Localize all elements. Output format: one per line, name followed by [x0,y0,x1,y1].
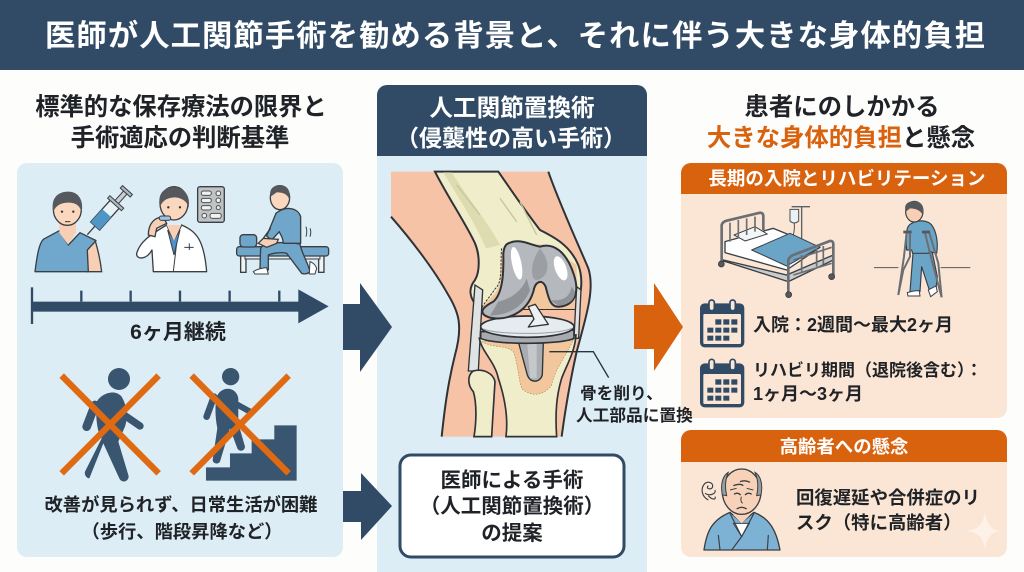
panel: concerns for the elderly [681,430,1007,557]
heading: burden and concerns: 大きな身体的負担と懸念 [707,125,975,152]
icon: hospital bed [718,207,835,298]
text: no improvement, daily life difficult: 改善が見られず、日常生活が困難 [45,494,317,515]
title banner: 医師が人工関節手術を勧める背景と、それに伴う大きな身体的負担 [45,18,985,53]
heading: burden and concerns [707,94,975,152]
box: surgery proposal by doctor: 医師による手術 [441,468,583,492]
icon: knee exercise on bench [237,185,329,274]
icon: injection patient [35,184,134,272]
icon: patient with crutches [874,201,970,297]
label: bone cut and replaced: 骨を削り、 [580,384,663,403]
leader line [549,352,609,378]
text: recovery delay and complications [796,487,980,533]
icon: walking crossed out [62,368,159,481]
tibia [479,335,576,437]
panel header: （侵襲性の高い手術） [396,125,626,151]
arrow: to surgery proposal [343,473,392,540]
femur [435,172,581,309]
icon: elderly patient [702,469,780,550]
box: surgery proposal by doctor [400,455,624,557]
text: no improvement, daily life difficult [45,494,317,542]
box: surgery proposal by doctor: （人工関節置換術） [420,494,604,518]
fibula [469,370,495,437]
panel: long hospitalization and rehab [681,163,1007,418]
panel: conservative therapy [17,163,343,557]
label: bone cut and replaced: 人工部品に置換 [576,406,693,425]
femoral component [482,241,576,318]
panel header [681,430,1007,462]
icon: doctor taking medicine [137,187,224,272]
label: bone cut and replaced [576,384,693,425]
icon: climbing stairs crossed out [192,368,297,481]
arrow: to surgery illustration [343,283,392,372]
title banner [0,0,1024,70]
panel: joint replacement surgery [377,85,647,572]
text: rehab period [753,360,982,404]
tibial stem [518,342,543,381]
illustration: knee implant [391,172,609,437]
label: six months continued: 6ヶ月継続 [130,321,226,344]
icon: calendar hospital stay [700,300,744,347]
decorative sparkle [965,512,1000,549]
panel header [681,163,1007,194]
heading: limits of conservative therapy [35,94,327,152]
text: recovery delay and complications: 回復遅延や合併症のリ [796,487,980,508]
text: recovery delay and complications: スク（特に高齢者） [796,512,962,533]
text: no improvement, daily life difficult: （歩行、階段昇降など） [81,521,283,542]
ligaments [468,285,483,371]
panel header: 長期の入院とリハビリテーション [708,168,986,189]
tibial tray [481,330,574,343]
timeline arrow: six months [32,287,329,324]
panel header [377,85,647,156]
box: surgery proposal by doctor: の提案 [481,522,543,545]
arrow: to patient burden [634,283,683,371]
heading: burden and concerns: 患者にのしかかる [744,94,940,121]
text: rehab period: リハビリ期間（退院後含む）： [753,360,982,380]
text: rehab period: 1ヶ月〜3ヶ月 [753,384,863,404]
heading: limits of conservative therapy: 手術適応の判断基準 [71,125,289,152]
icon: calendar rehab period [700,359,744,407]
panel header: 人工関節置換術 [429,95,595,122]
panel header: 高齢者への懸念 [780,436,908,457]
heading: limits of conservative therapy: 標準的な保存療法の限界と [35,94,327,121]
text: hospital stay duration: 入院：2週間〜最大2ヶ月 [753,315,953,335]
